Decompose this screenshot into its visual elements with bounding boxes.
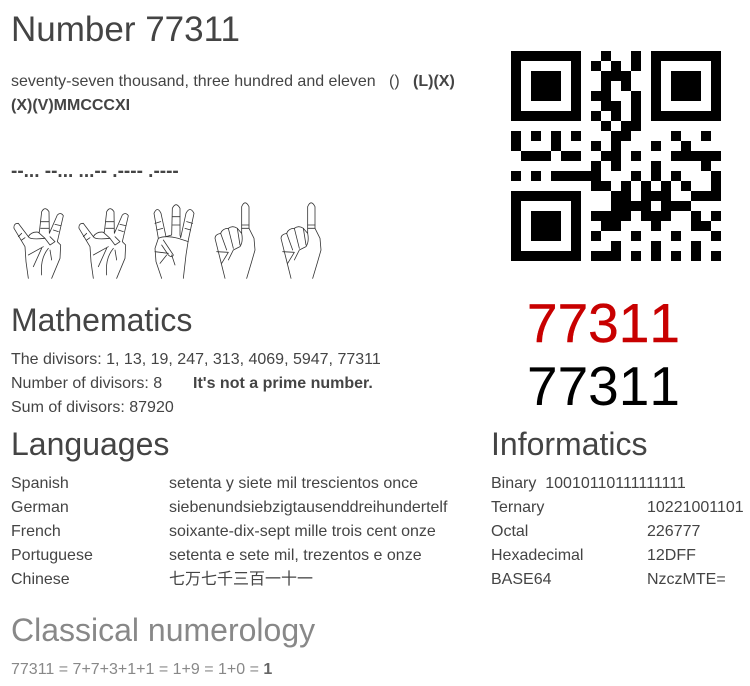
informatics table: Octal: [491, 523, 528, 540]
informatics table: 12DFF: [647, 547, 696, 564]
informatics table: [491, 475, 744, 588]
languages table: [11, 475, 448, 588]
languages table: Portuguese: [11, 547, 93, 564]
informatics table: BASE64: [491, 571, 551, 588]
heading: Classical numerology: Classical numerology: [11, 612, 315, 648]
informatics table: 10221001101: [647, 499, 744, 516]
numerology calculation: 77311 = 7+7+3+1+1 = 1+9 = 1+0 = 1: [11, 661, 272, 678]
languages table: Spanish: [11, 475, 69, 492]
languages table: Chinese: [11, 571, 70, 588]
number in black: 77311: [527, 355, 680, 417]
sum of divisors: Sum of divisors: 87920: [11, 399, 174, 416]
languages table: soixante-dix-sept mille trois cent onze: [169, 523, 436, 540]
number in words and roman numeral: seventy-seven thousand, three hundred and eleven () (L)(X): [11, 73, 455, 90]
informatics table: NzczMTE=: [647, 571, 726, 588]
icon: sign language hands: [14, 202, 322, 279]
languages table: 七万七千三百一十一: [169, 571, 313, 588]
languages table: setenta e sete mil, trezentos e onze: [169, 547, 422, 564]
heading: Mathematics: Mathematics: [11, 302, 192, 338]
number of divisors: Number of divisors: 8: [11, 375, 162, 392]
QR code: [511, 51, 721, 261]
informatics table: Binary 10010110111111111: [491, 475, 686, 492]
languages table: German: [11, 499, 69, 516]
number in words and roman numeral: [11, 73, 455, 114]
languages table: setenta y siete mil trescientos once: [169, 475, 418, 492]
heading: Informatics: Informatics: [491, 426, 647, 462]
prime status: It's not a prime number.: [193, 375, 373, 392]
languages table: siebenundsiebzigtausenddreihundertelf: [169, 499, 447, 516]
morse code: --... --... ...-- .---- .----: [11, 161, 179, 182]
informatics table: 226777: [647, 523, 700, 540]
number in words and roman numeral: (X)(V)MMCCCXI: [11, 97, 130, 114]
heading: Languages: Languages: [11, 426, 169, 462]
number in red: 77311: [527, 292, 680, 354]
informatics table: Hexadecimal: [491, 547, 583, 564]
title: Number 77311: [11, 10, 240, 49]
languages table: French: [11, 523, 61, 540]
divisors list: The divisors: 1, 13, 19, 247, 313, 4069, 5947, 77311: [11, 351, 381, 368]
informatics table: Ternary: [491, 499, 544, 516]
